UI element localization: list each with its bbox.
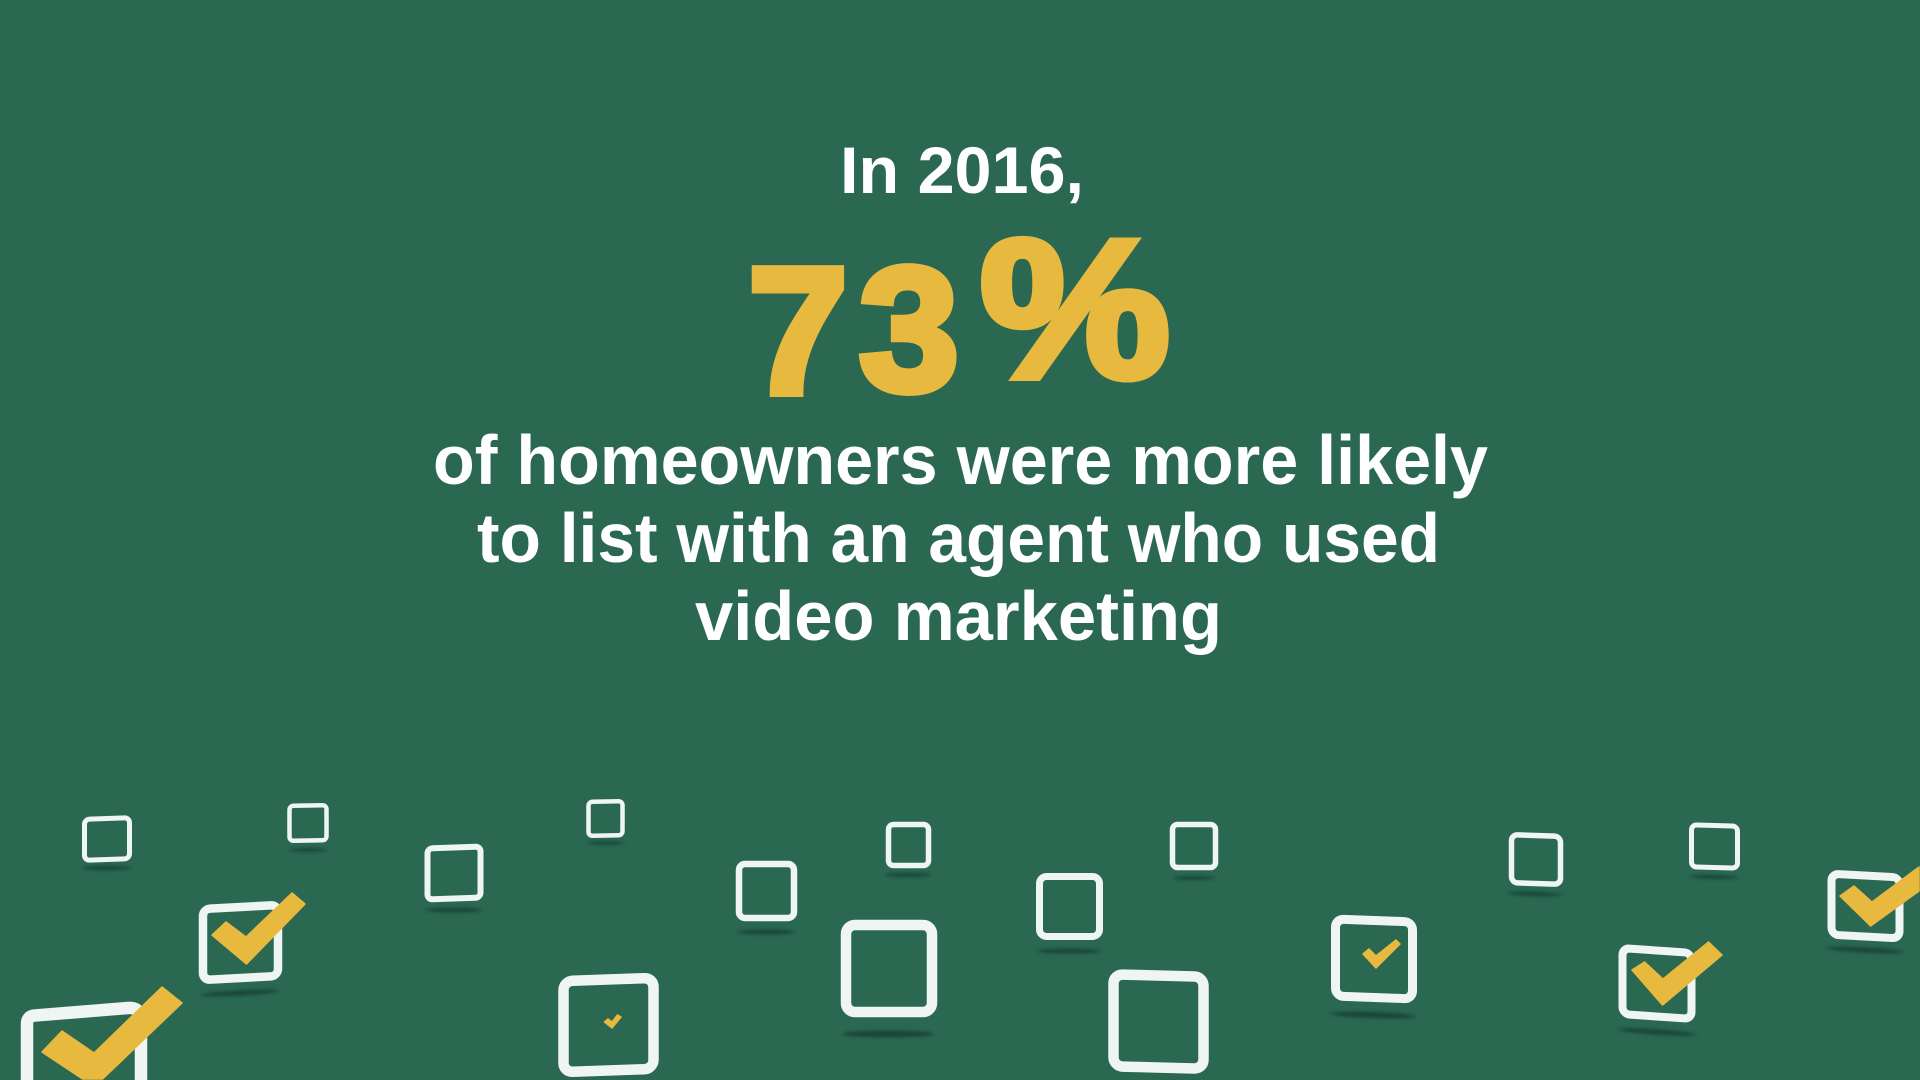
checked checkbox 18, cropped at right — [1826, 867, 1919, 955]
empty checkbox 9 — [885, 824, 931, 877]
empty checkbox 3 — [426, 847, 482, 912]
empty checkbox 12 — [1172, 824, 1216, 880]
intro text: In 2016,: In 2016, — [840, 133, 1084, 207]
checked checkbox 7, tiny tick — [564, 978, 654, 1072]
big statistic: 73% — [748, 199, 1170, 432]
big statistic: 73%: 7 — [748, 231, 848, 432]
empty checkbox 4 — [588, 801, 624, 845]
checkbox row of floating boxes — [27, 801, 1919, 1080]
empty checkbox 2 — [289, 805, 327, 852]
empty checkbox 10 — [842, 925, 934, 1037]
body text: homeowners statement: video marketing — [695, 577, 1222, 655]
body text: homeowners statement: to list with an agent who used — [477, 499, 1440, 577]
body text: homeowners statement: of homeowners were more likely — [433, 421, 1488, 499]
empty checkbox 15 — [1508, 835, 1562, 897]
body text: homeowners statement — [433, 421, 1488, 655]
empty checkbox 11 — [1037, 876, 1101, 953]
empty checkbox 16 — [1690, 825, 1738, 880]
empty checkbox 8 — [737, 864, 795, 934]
checked checkbox 14, small tick — [1330, 919, 1416, 1019]
big statistic: 73%: 3 — [859, 232, 959, 428]
empty checkbox 1 — [83, 818, 131, 870]
checked checkbox 5 — [201, 893, 305, 998]
checked checkbox 6, cropped at bottom — [27, 987, 182, 1080]
checked checkbox 17 — [1618, 942, 1722, 1037]
big statistic: 73%: % — [980, 199, 1170, 419]
empty checkbox 13 — [1114, 974, 1204, 1069]
